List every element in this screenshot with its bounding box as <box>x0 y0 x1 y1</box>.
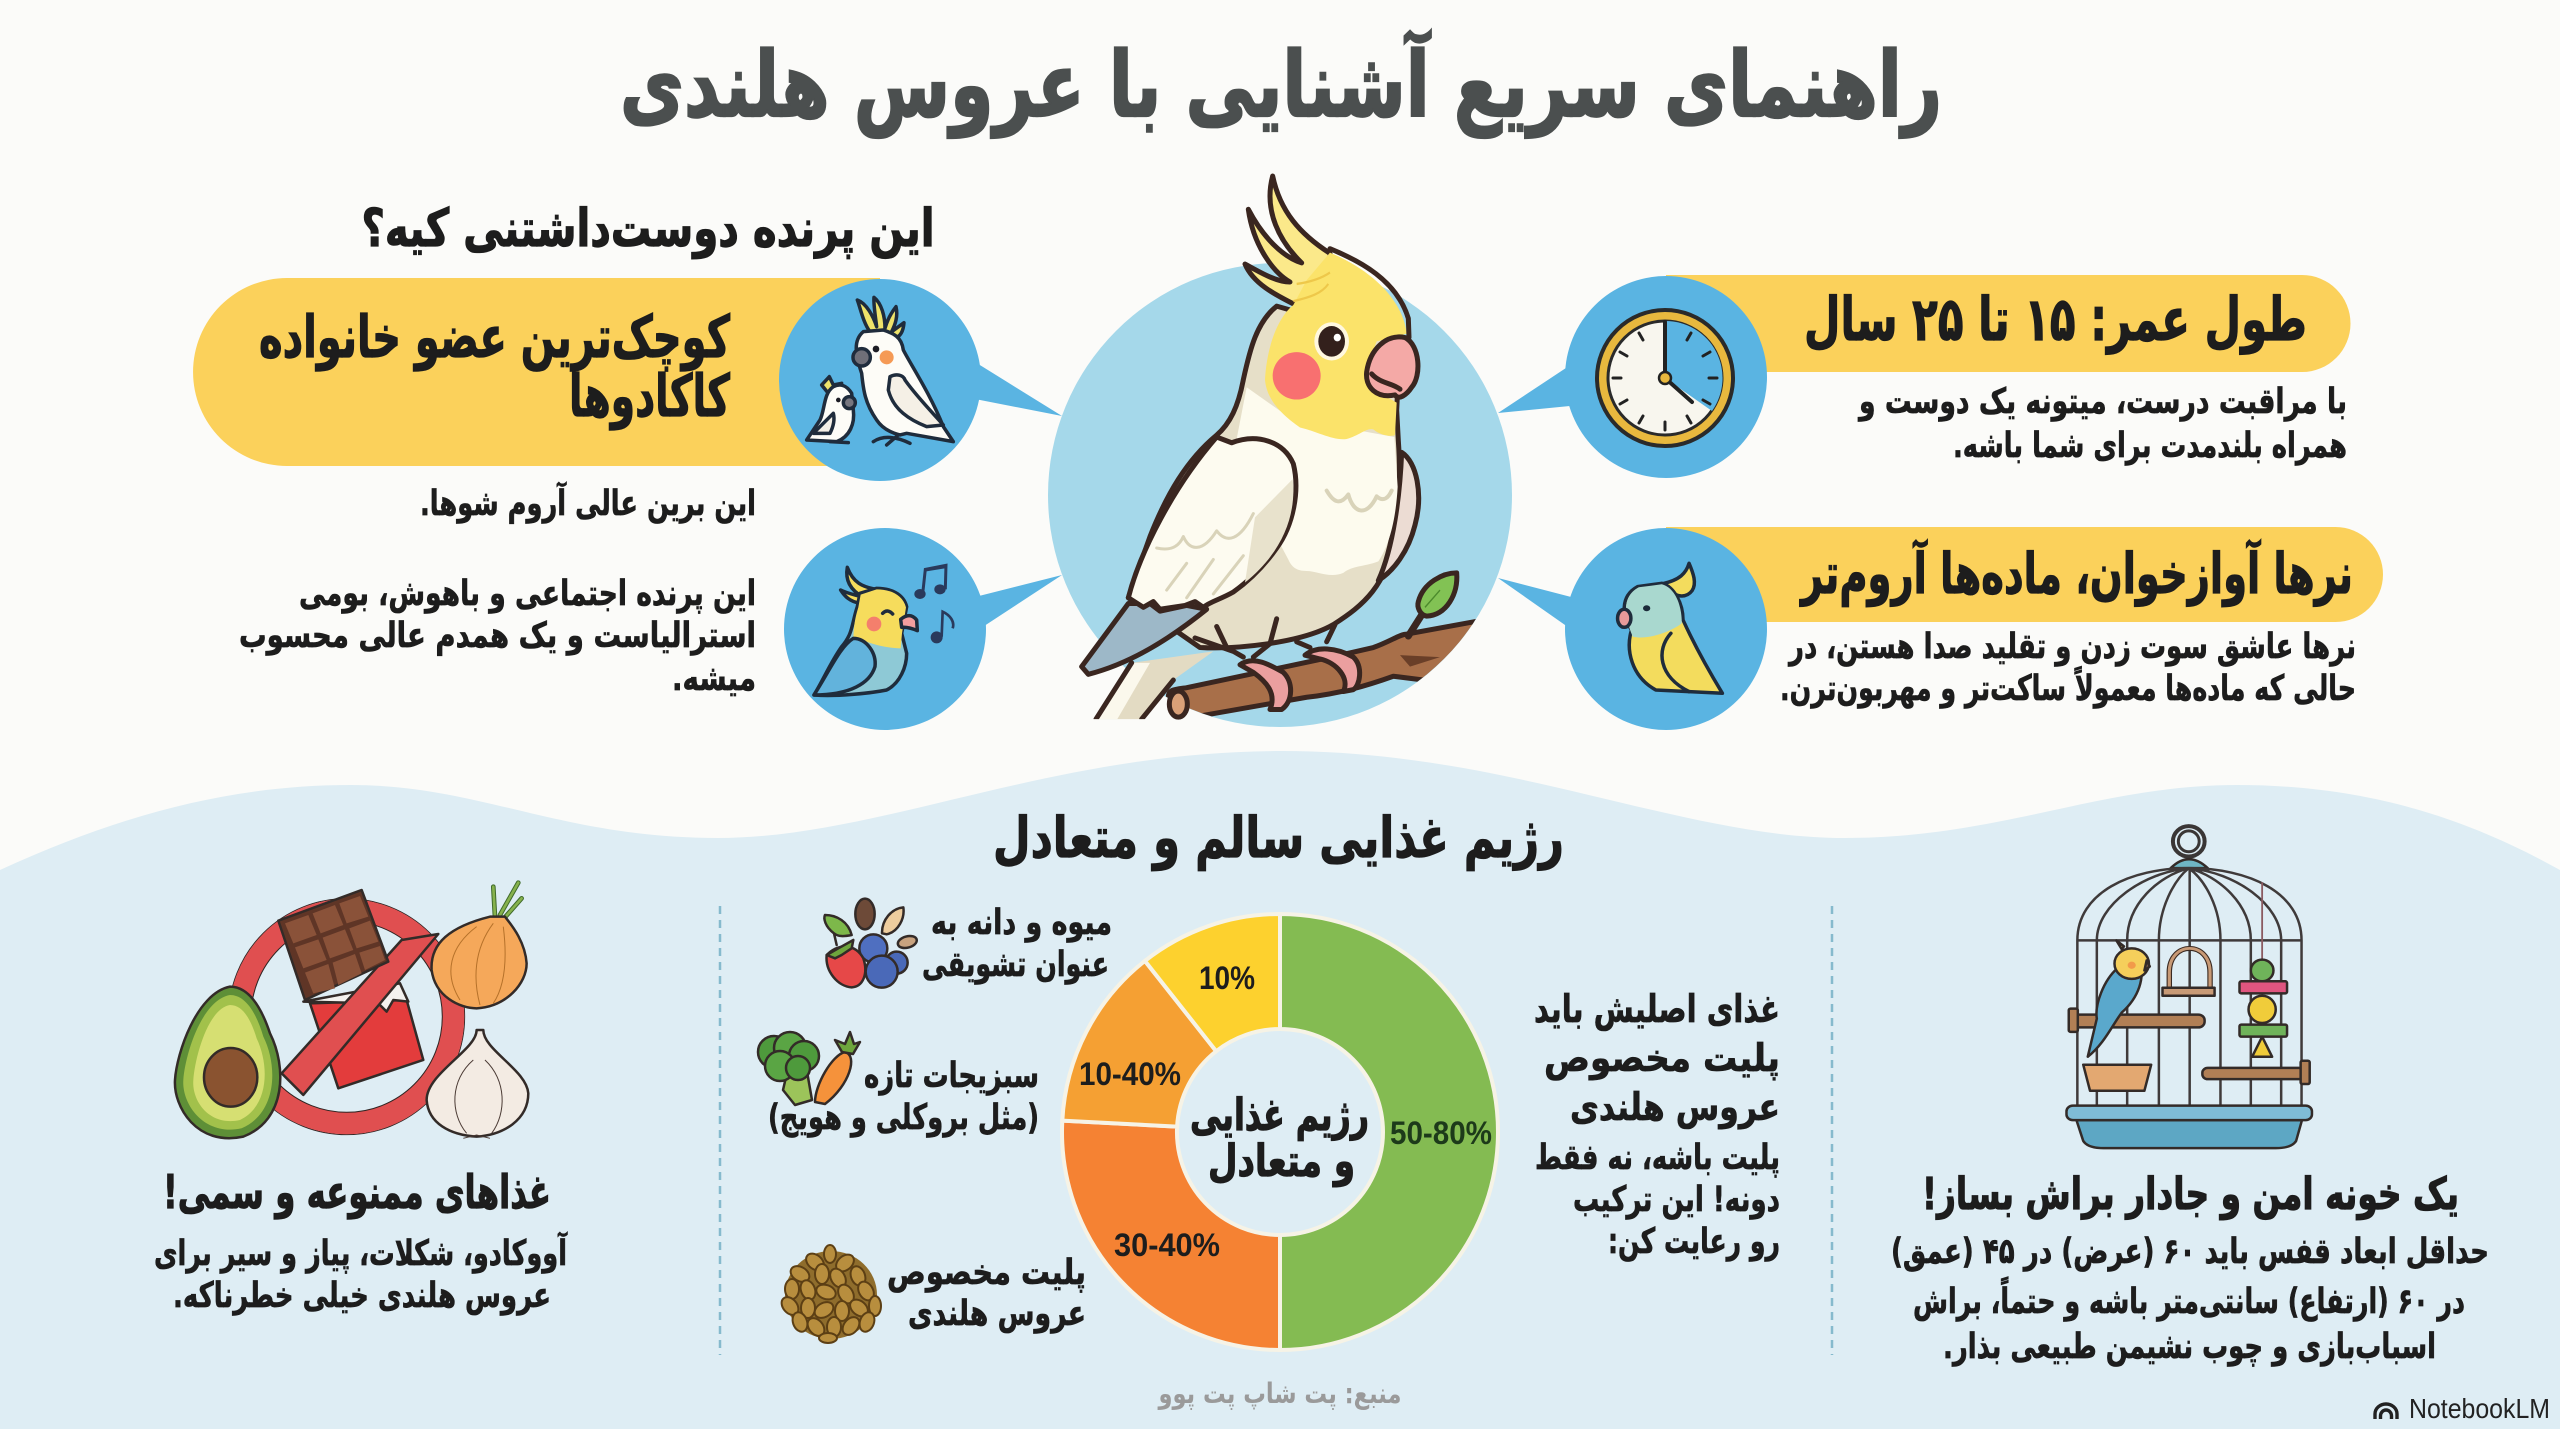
pill text: کاکادوها <box>569 362 730 431</box>
crest <box>1245 176 1333 304</box>
segment: dark orange <box>1062 1121 1280 1350</box>
lifespan description <box>1857 382 2347 466</box>
segment: yellow <box>1145 914 1280 1051</box>
donut chart <box>1062 914 1498 1350</box>
text block: main food should be pellets: پلیت باشه، نه فقط <box>1535 1138 1780 1178</box>
icon: bird cage <box>2066 826 2312 1148</box>
right bubble tails <box>1498 362 1580 632</box>
label: pellets <box>887 1253 1086 1334</box>
avocado <box>175 987 280 1138</box>
value: green: 50-80% <box>1390 1115 1492 1151</box>
cage bird <box>2088 940 2150 1057</box>
bubble circle with tail <box>779 279 1062 481</box>
label: fruit and seeds: میوه و دانه به <box>931 903 1112 943</box>
central circle <box>1048 263 1512 727</box>
cage description <box>1891 1232 2489 1367</box>
forbidden foods description <box>154 1231 568 1316</box>
pill text <box>259 303 730 431</box>
cheek <box>1273 352 1321 400</box>
yellow pill <box>1666 275 2350 372</box>
label: pellets: پلیت مخصوص <box>887 1253 1086 1293</box>
value: yellow: 10% <box>1199 960 1255 996</box>
red wrapper <box>310 1000 423 1088</box>
donut centre text: و متعادل <box>1208 1136 1355 1187</box>
forbidden foods description: عروس هلندی خیلی خطرناکه. <box>173 1276 551 1316</box>
text block: social bird from Australia: این پرنده اجتماعی و باهوش، بومی <box>299 574 756 614</box>
description: نرها عاشق سوت زدن و تقلید صدا هستن، در <box>1788 627 2356 667</box>
NotebookLM logo <box>2375 1393 2550 1424</box>
label: fresh vegetables <box>768 1056 1039 1138</box>
icon: clock <box>1597 310 1733 446</box>
prohibition ring <box>229 899 465 1135</box>
text block: social bird from Australia <box>239 574 756 699</box>
forbidden foods description: آووکادو، شکلات، پیاز و سیر برای <box>154 1231 568 1274</box>
bubble circle <box>1565 528 1767 730</box>
value: light orange: 10-40% <box>1079 1056 1181 1092</box>
leaf <box>1408 573 1457 636</box>
panel: smallest cockatoo pill <box>193 278 1062 481</box>
body <box>1128 306 1400 648</box>
food bowl <box>2083 1065 2151 1091</box>
yellow pill <box>193 278 880 466</box>
text block: social bird from Australia: استرالیاست و یک همدم عالی محسوب <box>239 616 756 656</box>
bubble circle with tail <box>784 528 1062 730</box>
garlic <box>427 1030 528 1138</box>
icon: singing cockatiel <box>814 565 953 695</box>
hanging toy <box>2239 882 2287 1057</box>
perch top <box>2069 1009 2205 1032</box>
description: حالی که ماده‌ها معمولاً ساکت‌تر و مهربون‌ترن. <box>1780 666 2356 709</box>
icon: broccoli and carrot <box>758 1032 860 1105</box>
value: dark orange: 30-40% <box>1114 1227 1220 1263</box>
ring and cap <box>2173 826 2205 857</box>
bubble circle <box>1565 276 1767 478</box>
wing <box>1082 437 1296 674</box>
text block: main food should be pellets: غذای اصلیش باید <box>1534 987 1780 1031</box>
panel: male and female <box>1565 527 2383 730</box>
tail <box>1096 651 1213 720</box>
feet <box>1240 649 1360 710</box>
label: fruit and seeds: عنوان تشویقی <box>922 945 1109 985</box>
heading: healthy diet: رژیم غذایی سالم و متعادل <box>993 806 1564 871</box>
lifespan description: همراه بلندمدت برای شما باشه. <box>1953 426 2347 466</box>
text block: main food should be pellets: دونه! این ترکیب <box>1573 1180 1780 1220</box>
panel: lifespan <box>1565 275 2350 478</box>
text block: main food should be pellets: پلیت مخصوص <box>1544 1036 1780 1080</box>
icon: fruit and seeds <box>824 899 918 988</box>
icon: two cockatoos <box>807 297 953 445</box>
icon: yellow cockatiel <box>1618 563 1722 693</box>
donut centre text <box>1190 1090 1369 1187</box>
label: fresh vegetables: (مثل بروکلی و هویج) <box>768 1098 1039 1138</box>
illustration: cockatiel on branch <box>1082 176 1480 720</box>
source note: منبع: پت شاپ پت پوو <box>1157 1377 1402 1410</box>
bars <box>2077 868 2302 1106</box>
swing <box>2163 948 2215 996</box>
chocolate bar <box>278 890 388 1000</box>
head <box>1265 253 1407 439</box>
label: fresh vegetables: سبزیجات تازه <box>864 1056 1039 1096</box>
heading: who is this bird: این پرنده دوست‌داشتنی کیه؟ <box>362 199 934 259</box>
segment: light orange <box>1062 961 1216 1127</box>
panel: forbidden foods <box>154 883 568 1316</box>
description <box>1780 627 2356 709</box>
segment: green pellets <box>1280 914 1498 1350</box>
title: راهنمای سریع آشنایی با عروس هلندی <box>620 30 1942 139</box>
lifespan heading: طول عمر: ۱۵ تا ۲۵ سال <box>1804 285 2307 355</box>
text block: main food should be pellets <box>1534 987 1780 1262</box>
panel: cage <box>1891 826 2489 1367</box>
lifespan description: با مراقبت درست، میتونه یک دوست و <box>1857 382 2347 422</box>
legs <box>1195 619 1335 657</box>
icon: pellets <box>778 1245 881 1343</box>
branch <box>1168 621 1480 718</box>
wave background panel <box>0 751 2560 1429</box>
cage base <box>2066 1106 2312 1148</box>
donut centre text: رژیم غذایی <box>1190 1090 1369 1141</box>
text block: social bird from Australia: میشه. <box>672 659 756 699</box>
eye <box>1314 322 1349 360</box>
label: fruit and seeds <box>922 903 1112 985</box>
label: pellets: عروس هلندی <box>908 1294 1086 1334</box>
panel: singing bird bubble <box>784 528 1062 730</box>
text: calm shoulders: این برین عالی آروم شوها. <box>420 481 756 524</box>
yellow pill <box>1666 527 2383 622</box>
beak <box>1367 337 1418 397</box>
text block: main food should be pellets: عروس هلندی <box>1570 1085 1780 1130</box>
onion <box>432 883 527 1008</box>
perch bottom <box>2202 1061 2310 1084</box>
forbidden foods heading: غذاهای ممنوعه و سمی! <box>163 1165 551 1219</box>
pill text: کوچک‌ترین عضو خانواده <box>259 303 730 372</box>
icon: forbidden foods <box>175 883 528 1138</box>
icon: notebook arches <box>2375 1404 2397 1419</box>
text block: main food should be pellets: رو رعایت کن: <box>1608 1222 1780 1262</box>
